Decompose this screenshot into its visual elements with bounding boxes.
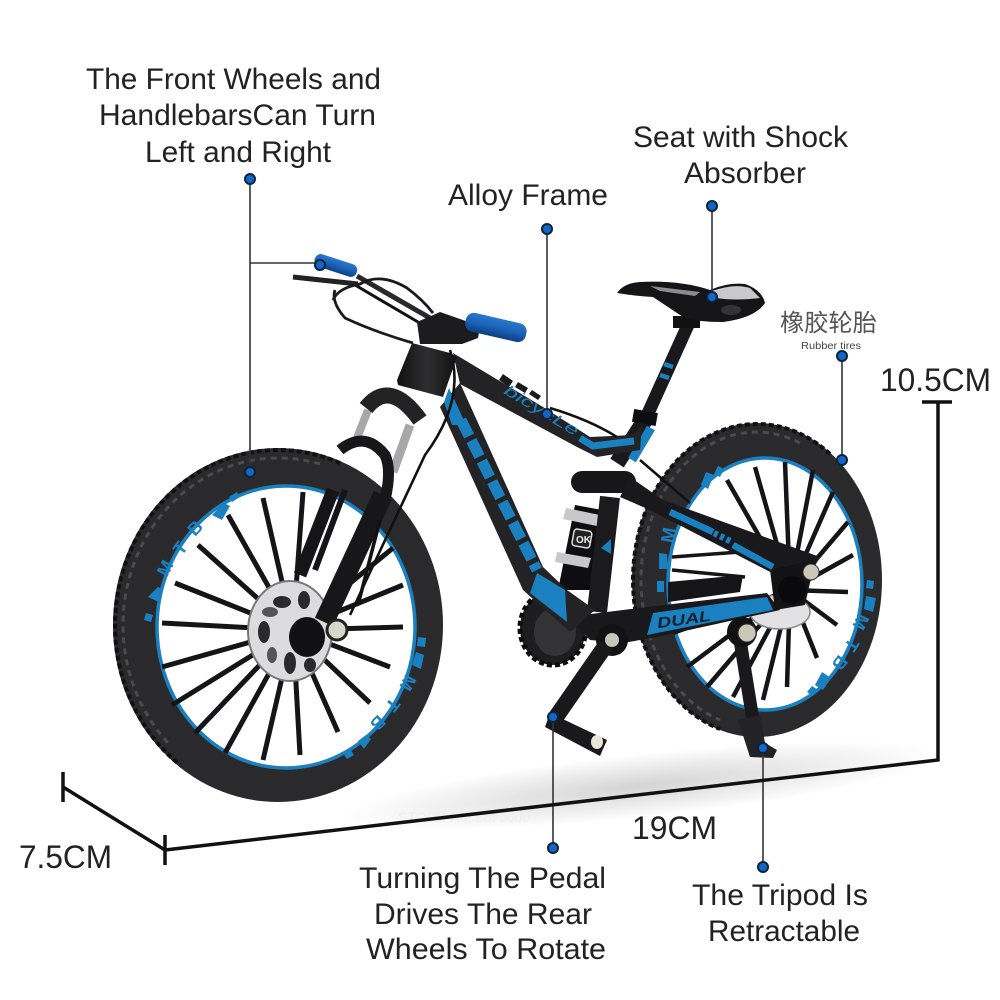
rear fork leg [300, 490, 333, 575]
rear tyre lettering: M [657, 526, 679, 544]
rear suspension shock [555, 482, 625, 590]
ground shadow [338, 723, 942, 849]
front fork [289, 343, 457, 657]
rear tyre lettering: M [848, 611, 873, 633]
callout: rubber tires: 橡胶轮胎 [780, 310, 877, 337]
lower swingarm [567, 593, 780, 643]
rear tyre lettering [657, 466, 876, 696]
rear axle [770, 560, 815, 610]
front tyre lettering: M [153, 557, 178, 579]
rear suspension shock: OK [576, 535, 592, 546]
bottom bracket bolt [596, 624, 628, 656]
saddle [617, 282, 765, 322]
upper crown [366, 396, 420, 420]
axle [289, 617, 325, 657]
pedal crank [545, 645, 607, 756]
front wheel [113, 448, 443, 802]
watermark: STORE No. 2375000 [398, 809, 530, 825]
head tube [397, 343, 457, 397]
front tyre lettering: M [395, 672, 420, 694]
dimension: length: 19CM [632, 810, 717, 846]
front tyre lettering [144, 492, 426, 759]
callout: tripod: The Tripod Is [692, 879, 868, 912]
callout: pedal: Turning The Pedal [359, 862, 606, 895]
callout: rubber tires [780, 310, 877, 465]
callout: seat [633, 121, 849, 302]
brake disc [248, 581, 332, 681]
callout: pedal [359, 712, 606, 966]
dimension lines [19, 362, 991, 875]
callout: front wheels: HandlebarsCan Turn [99, 99, 376, 132]
seat stay [597, 497, 610, 612]
front tyre lettering: B [184, 517, 207, 540]
grips [464, 311, 528, 344]
rear tyre lettering: B [828, 652, 852, 674]
front tyre lettering: B [366, 711, 389, 734]
callout: tripod: Retractable [708, 915, 860, 948]
dimension: width: 7.5CM [19, 839, 112, 875]
lower arch [340, 441, 388, 500]
callout: seat: Seat with Shock [633, 121, 849, 154]
chainring [520, 591, 586, 665]
callout: alloy frame [448, 179, 608, 419]
stem [417, 312, 480, 344]
seat tube [617, 420, 645, 463]
callout: seat: Absorber [684, 157, 806, 190]
handlebars [293, 252, 528, 344]
callout: rubber tires: Rubber tires [801, 341, 861, 352]
rear tyre lettering: T [840, 635, 863, 655]
upper swingarm [620, 477, 820, 587]
callout: front wheels: Left and Right [145, 136, 332, 169]
callout: alloy frame: Alloy Frame [448, 179, 608, 212]
rear brake disc [750, 595, 810, 629]
stanchions [357, 410, 368, 438]
front fork leg [324, 495, 383, 622]
callout: pedal: Wheels To Rotate [366, 933, 606, 966]
callout: front wheels: The Front Wheels and [86, 63, 381, 96]
frame: bicycLe [501, 382, 582, 440]
front tyre lettering: T [381, 694, 404, 715]
kickstand [727, 617, 777, 758]
dimension: height: 10.5CM [880, 362, 991, 398]
cables [350, 350, 454, 615]
frame [440, 316, 820, 656]
callout: tripod [692, 743, 868, 948]
callout: front wheels [86, 63, 381, 477]
down tube [440, 383, 595, 632]
callout: pedal: Drives The Rear [374, 898, 592, 931]
frame: DUAL [656, 608, 712, 632]
top tube [453, 353, 642, 457]
rear wheel [632, 423, 882, 737]
front tyre lettering: T [169, 538, 192, 559]
